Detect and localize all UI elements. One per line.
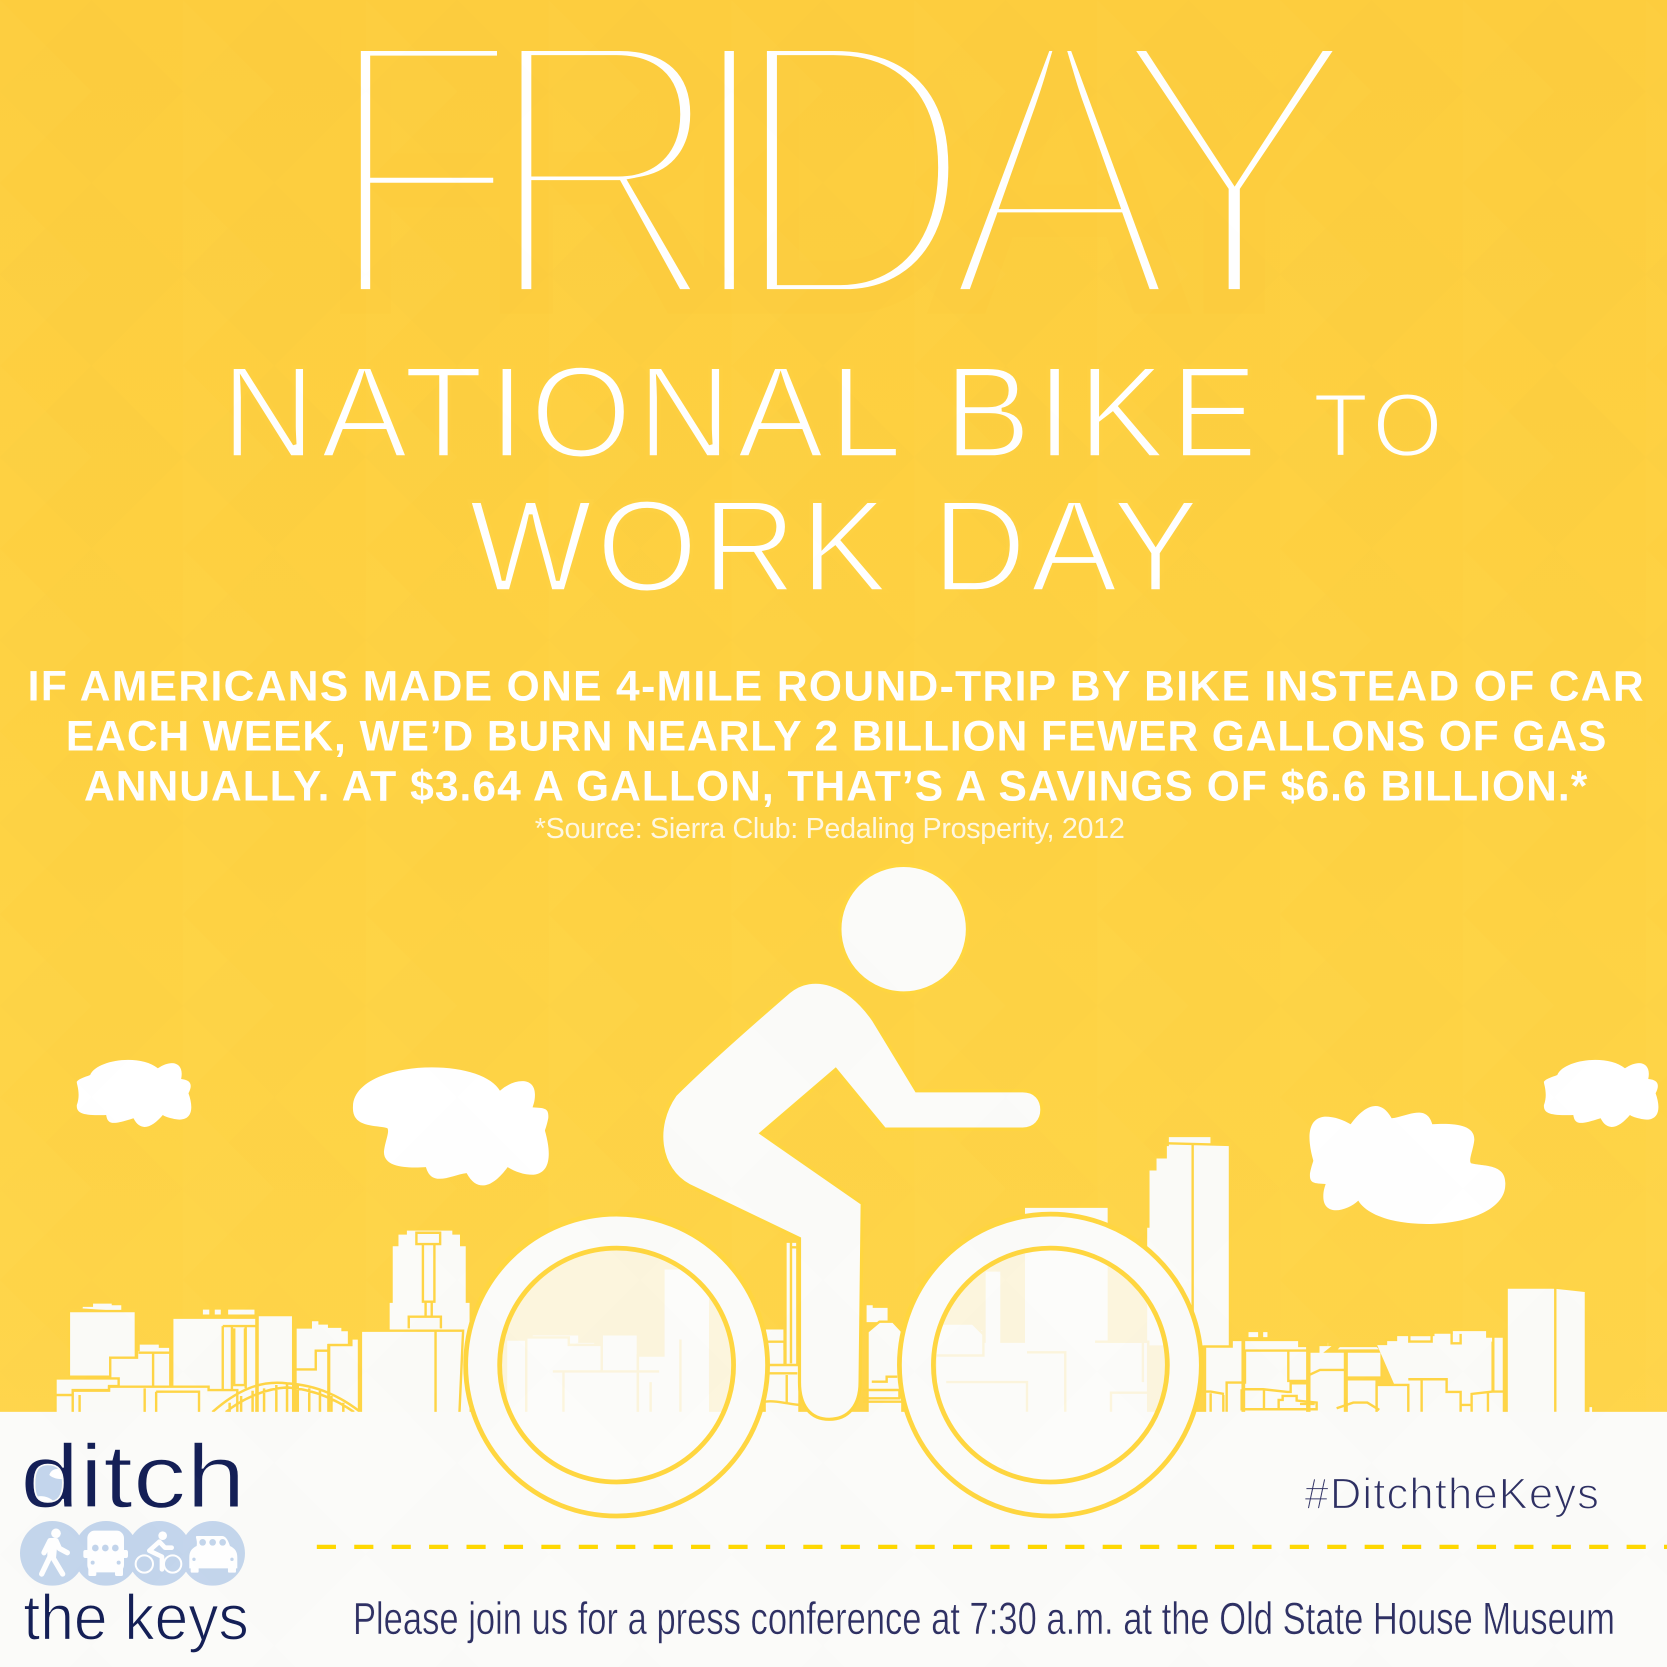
icon: bus [83, 1531, 128, 1576]
dashed road line [317, 1545, 1667, 1549]
logo word: ditch: ditch [20, 1427, 246, 1528]
body text: statistic: IF AMERICANS MADE ONE 4-MILE ROUND-TRIP BY BIKE INSTEAD OF CAR [28, 664, 1644, 711]
icon: cyclist [136, 1531, 181, 1573]
body text: statistic: ANNUALLY. AT $3.64 A GALLON, THAT’S A SAVINGS OF $6.6 BILLION.* [84, 764, 1588, 811]
logo: ditch the keys [20, 1427, 249, 1653]
skyline: left [55, 1229, 471, 1417]
icon: car [189, 1536, 237, 1573]
body text: statistic [28, 664, 1644, 811]
heading: National Bike to Work Day: WORK DAY [469, 473, 1199, 619]
body text: statistic: EACH WEEK, WE’D BURN NEARLY 2 BILLION FEWER GALLONS OF GAS [66, 714, 1606, 761]
wheel: left [466, 1214, 768, 1516]
hashtag: #DitchtheKeys [1304, 1471, 1599, 1519]
title: FRIDAY [324, 0, 1364, 383]
heading: National Bike to Work Day: NATIONAL BIKE [221, 339, 1258, 485]
logo words: the keys: the keys [23, 1581, 249, 1653]
heading: National Bike to Work Day [221, 339, 1443, 619]
icon: pedestrian [42, 1529, 67, 1574]
skyline: right [1146, 1136, 1593, 1417]
ground band [0, 1412, 1667, 1667]
skyline: center [765, 1242, 902, 1417]
clouds [77, 1060, 1658, 1224]
source note: *Source: Sierra Club: Pedaling Prosperity, 2012 [535, 813, 1125, 845]
logo icons [20, 1521, 245, 1586]
skyline seen through wheels [506, 1207, 1148, 1419]
wheel: right [899, 1214, 1201, 1516]
logo bowl of d [29, 1464, 70, 1506]
cyclist figure [662, 865, 1042, 1419]
heading: National Bike to Work Day: TO [1313, 375, 1443, 476]
